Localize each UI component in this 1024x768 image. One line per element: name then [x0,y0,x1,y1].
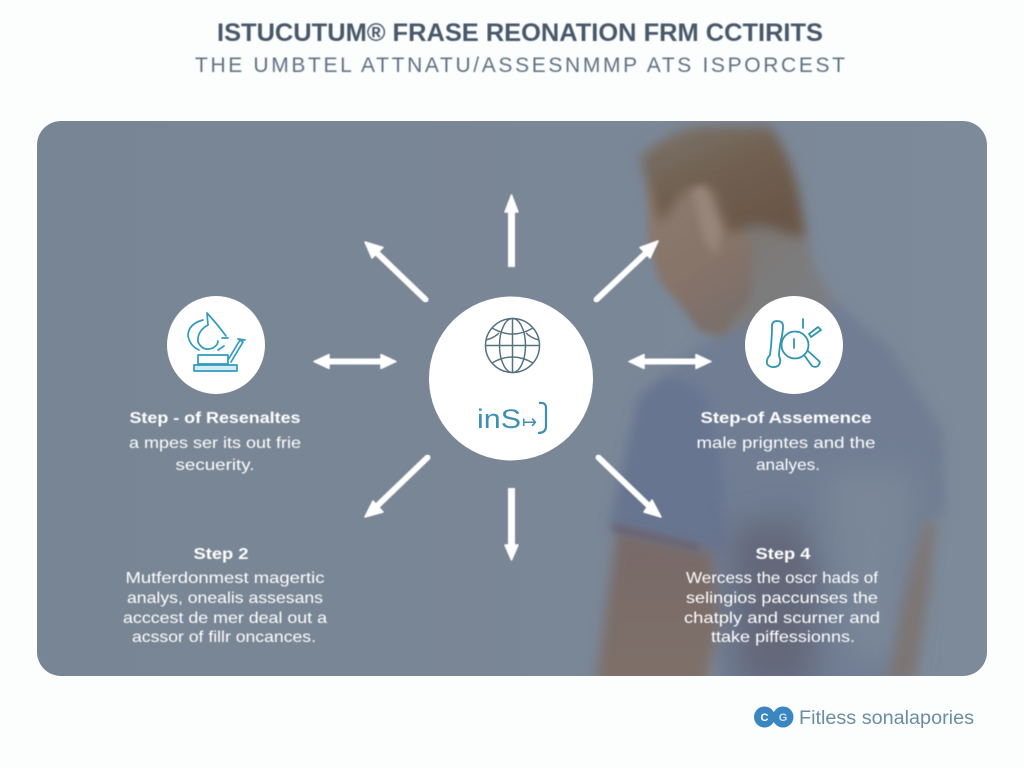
step: resonance text: a mpes ser its out frie [129,435,301,452]
center circle with globe [429,296,593,460]
step: assessment icon circle [745,296,843,394]
center label: inS [477,404,521,434]
sleeve hem shadow [612,524,700,551]
step 2 text: analys, onealis assesans [127,590,323,607]
step 2 text: acssor of fillr oncances. [132,629,316,646]
step: resonance text [129,410,301,474]
icon: logo circles [754,706,794,728]
arrow: left double [314,354,396,368]
step 4 text: Step 4 [756,546,811,563]
shirt body [674,308,943,676]
icon: logo circles: G [779,712,787,724]
step: resonance text: Step - of Resenaltes [130,410,301,427]
arrow: upper right [596,241,658,300]
step 2 text: Mutferdonmest magertic [126,570,324,587]
logo wordmark: Fitless sonalapories [799,708,974,729]
step 2 text [123,546,327,646]
step 4 text [684,546,880,646]
arrow: down [505,488,518,560]
ear [692,185,722,255]
footer logo [754,706,974,729]
step: assessment text [696,410,876,474]
icon: thermometer and magnifier [767,319,821,367]
arrow: right double [629,354,711,368]
center label [477,403,546,434]
icon: globe [486,318,540,372]
left arm [595,530,720,690]
step: assessment text: male prigntes and the [696,435,876,452]
right arm [888,520,936,680]
hair [640,126,805,238]
step 2 text: Step 2 [194,546,249,563]
step 4 text: ttake piffessionns. [711,629,855,646]
subtitle: THE UMBTEL ATTNATU/ASSESNMMP ATS ISPORCEST [195,54,845,77]
step 2 text: acccest de mer deal out a [123,610,327,627]
shirt shadow [730,515,820,690]
arrow: upper left [365,242,426,300]
step 4 text: chatply and scurner and [684,610,880,627]
arrow: lower right [598,458,661,517]
step: assessment text: analyes. [756,457,820,474]
icon: drop and tool [188,313,245,371]
panel: main background with blurred athlete [37,121,987,690]
arrow: up [505,195,518,267]
step: assessment text: Step-of Assemence [700,410,872,427]
neck and back of head [718,225,835,338]
center label: ↦ [522,412,537,433]
arrow: lower left [365,458,428,517]
title: ISTUCUTUM® FRASE REONATION FRM CCTIRITS [217,19,823,47]
step: resonance text: secuerity. [176,457,254,474]
step: resonance icon circle [167,296,265,394]
step 4 text: selingios paccunses the [686,590,878,607]
shirt highlight [841,480,902,646]
shirt sleeve [618,386,716,541]
face [648,170,752,335]
icon: logo circles: C [761,712,769,724]
step 4 text: Wercess the oscr hads of [686,570,879,587]
photo: blurred person [595,126,945,690]
